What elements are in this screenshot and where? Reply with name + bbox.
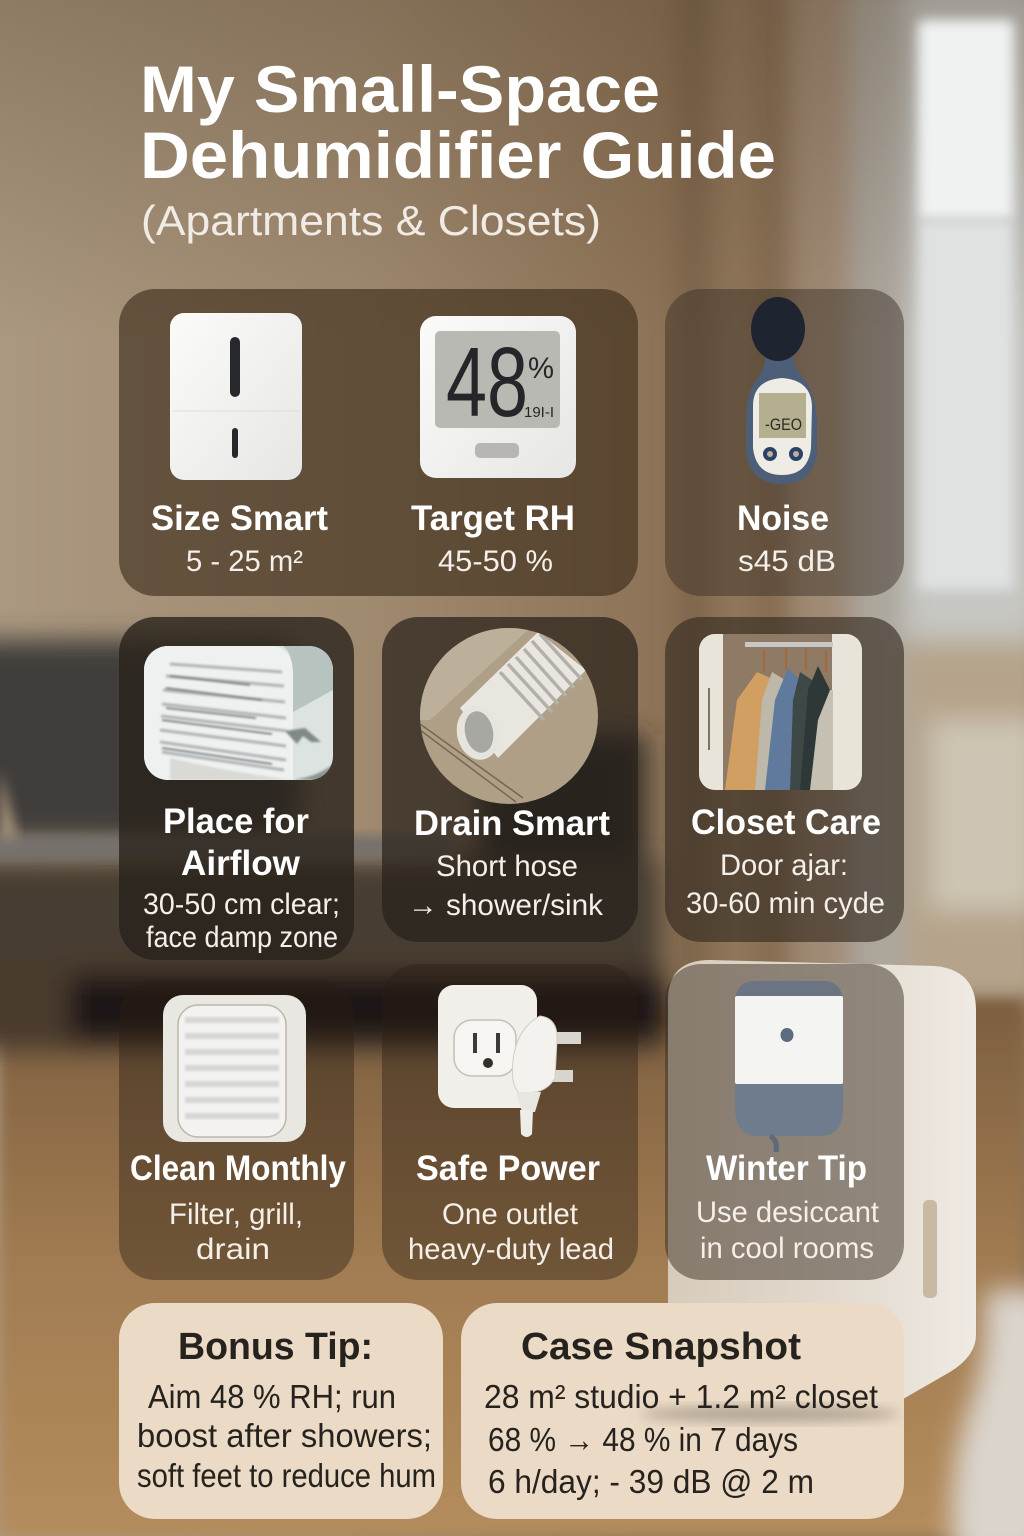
label: closet care: Closet Care <box>691 803 881 842</box>
label: place for airflow <box>163 802 309 883</box>
panel: bonus tip <box>119 1303 443 1519</box>
detail: winter: Use desiccant <box>696 1196 880 1229</box>
value: noise limit: s45 dB <box>738 545 836 578</box>
label: size smart: Size Smart <box>151 499 328 538</box>
label: winter tip: Winter Tip <box>706 1149 867 1188</box>
text: bonus tip body: boost after showers; <box>137 1417 432 1454</box>
detail: power <box>408 1198 614 1266</box>
detail: clean <box>169 1198 303 1266</box>
detail: airflow: 30-50 cm clear; <box>143 888 340 921</box>
icon: closet with clothes <box>699 634 862 790</box>
detail: clean: drain <box>196 1233 270 1266</box>
icon: sound level meter: -GEO <box>765 415 802 434</box>
icon: small dehumidifier <box>170 313 302 480</box>
detail: closet: Door ajar: <box>720 849 848 882</box>
icon: hygrometer <box>420 316 576 478</box>
icon: sound level meter <box>746 297 817 484</box>
icon: air vent <box>144 646 333 780</box>
panel: winter tip <box>665 964 904 1280</box>
detail: airflow: face damp zone <box>146 921 338 954</box>
detail: power: One outlet <box>442 1198 579 1231</box>
panel: closet care <box>665 617 904 942</box>
panel: noise <box>665 289 904 596</box>
detail: hose: Short hose <box>436 850 578 883</box>
detail: hose <box>408 850 604 922</box>
title: Dehumidifier Guide <box>140 118 776 192</box>
text: bonus tip body: Aim 48 % RH; run <box>148 1378 396 1415</box>
panel: safe power <box>382 964 638 1280</box>
detail: airflow <box>143 888 340 954</box>
value: target humidity: 45-50 % <box>438 545 553 578</box>
text: case snapshot body <box>484 1378 878 1500</box>
large dehumidifier in background <box>668 960 976 1418</box>
heading: case snapshot: Case Snapshot <box>521 1326 801 1368</box>
title: My Small-Space <box>140 52 660 126</box>
detail: hose: → shower/sink <box>408 889 604 922</box>
icon: hygrometer: 48 <box>446 327 528 437</box>
icon: filter <box>163 995 306 1142</box>
text: bonus tip body: soft feet to reduce hum <box>137 1457 436 1494</box>
subtitle: (Apartments & Closets) <box>141 197 601 244</box>
detail: closet <box>686 849 885 920</box>
label: drain smart: Drain Smart <box>414 804 610 843</box>
panel: drain smart <box>382 617 638 942</box>
text: case snapshot body: 28 m² studio + 1.2 m² closet <box>484 1378 878 1415</box>
label: place for airflow: Airflow <box>181 844 301 883</box>
detail: closet: 30-60 min cyde <box>686 887 885 920</box>
icon: hygrometer: 19I-I <box>524 404 554 421</box>
panel: place for airflow <box>119 617 354 960</box>
label: safe power: Safe Power <box>416 1149 600 1188</box>
text: case snapshot body: 68 % → 48 % in 7 days <box>488 1421 798 1458</box>
panel: clean monthly <box>119 980 354 1280</box>
icon: drain hose <box>420 628 598 804</box>
detail: winter: in cool rooms <box>700 1232 874 1265</box>
detail: winter <box>696 1196 880 1265</box>
icon: desiccant dehumidifier <box>735 981 843 1152</box>
detail: clean: Filter, grill, <box>169 1198 303 1231</box>
text: case snapshot body: 6 h/day; - 39 dB @ 2 m <box>488 1463 814 1500</box>
text: bonus tip body <box>137 1378 436 1494</box>
value: size range: 5 - 25 m² <box>186 545 303 578</box>
heading: bonus tip: Bonus Tip: <box>178 1326 373 1368</box>
title <box>140 52 776 192</box>
panel: size smart and target RH <box>119 289 638 596</box>
detail: power: heavy-duty lead <box>408 1233 614 1266</box>
panel: case snapshot <box>461 1303 904 1519</box>
label: target RH: Target RH <box>411 499 575 538</box>
label: place for airflow: Place for <box>163 802 309 841</box>
label: noise: Noise <box>737 499 829 538</box>
icon: hygrometer: % <box>528 352 554 385</box>
icon: outlet and plug <box>438 985 581 1137</box>
label: clean monthly: Clean Monthly <box>130 1149 346 1188</box>
